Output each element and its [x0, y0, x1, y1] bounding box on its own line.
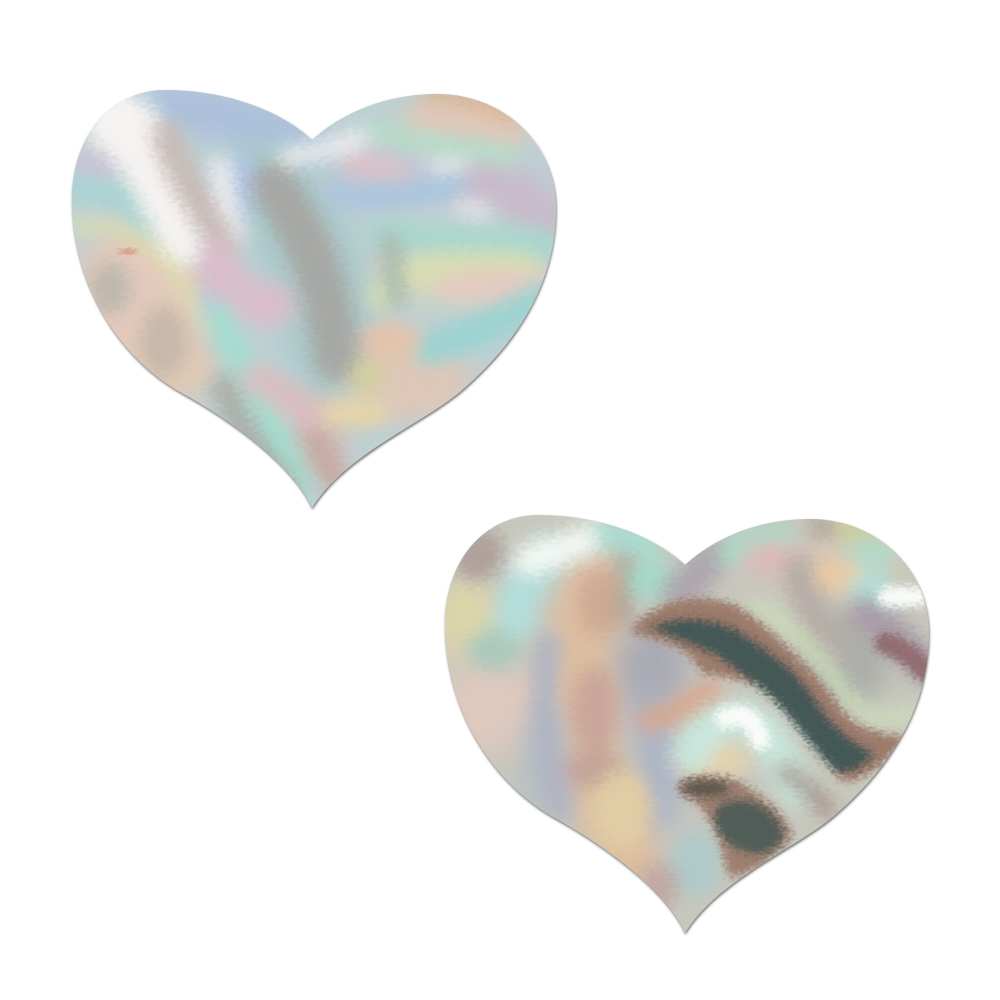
- heart: upper left holographic: [70, 90, 558, 510]
- dark band: [630, 597, 928, 877]
- heart: lower right holographic: [444, 514, 932, 936]
